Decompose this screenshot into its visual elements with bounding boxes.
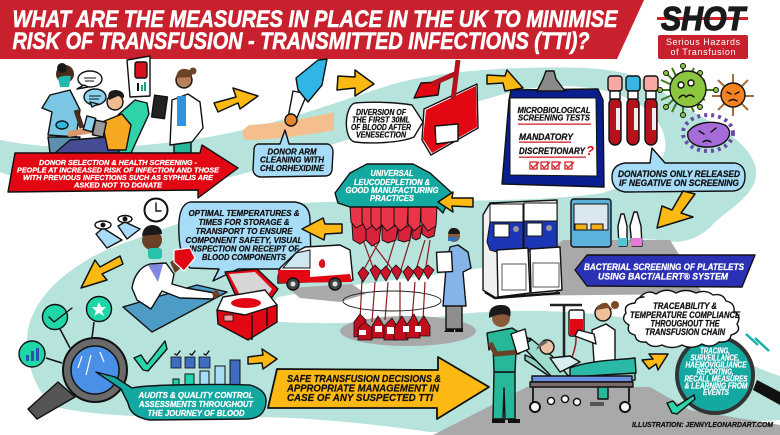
arrow: donor to arm <box>214 88 258 112</box>
magnifier handle <box>28 382 75 419</box>
header banner <box>0 0 644 59</box>
lower blood bags <box>354 314 430 340</box>
cloud: traceability: TEMPERATURE COMPLIANCE <box>630 310 741 320</box>
icon: check circle <box>42 304 72 330</box>
bubble: arm cleaning: CHLORHEXIDINE <box>260 163 324 173</box>
arrow: to diversion <box>337 70 374 96</box>
arrow: down to platelets <box>657 191 695 228</box>
bubble: donations released: DONATIONS ONLY RELEASED <box>618 169 740 179</box>
title: WHAT ARE THE MEASURES IN PLACE IN THE UK TO MINIMISE <box>12 6 618 33</box>
bubble: donations released <box>612 148 745 192</box>
bubble: arm cleaning <box>253 130 333 177</box>
bubble: audits: ASSESSMENTS THROUGHOUT <box>138 399 254 409</box>
icon: green virus <box>658 64 718 118</box>
icon: bars circle <box>19 341 45 367</box>
bubble: optimal temperatures: COMPONENT SAFETY, VISUAL <box>186 235 302 245</box>
title <box>12 6 618 55</box>
bubble: optimal temperatures: OPTIMAL TEMPERATURES & <box>188 208 300 218</box>
magnifier: tracing and surveillance: SURVEILLANCE, <box>690 354 740 362</box>
bubble: diversion: DIVERSION OF <box>356 108 406 117</box>
big yellow arrow: safe transfusion <box>268 357 489 419</box>
icon: chart poster <box>127 56 150 97</box>
clipboard: microbiological screening tests: ? <box>586 143 594 158</box>
illustration: arm cleaning <box>243 59 334 140</box>
magnifier: tracing and surveillance: & LEARNING FROM <box>684 382 748 390</box>
big yellow arrow: safe transfusion: SAFE TRANSFUSION DECISIONS & <box>287 373 441 385</box>
donor <box>55 90 131 153</box>
label: bacterial screening: USING BACT/ALERT® SYSTEM <box>598 272 728 282</box>
standing nurse <box>487 305 531 423</box>
SHOT logo <box>657 0 748 59</box>
bubble: donations released: IF NEGATIVE ON SCREENING <box>619 178 739 188</box>
icon: diversion blood bag <box>414 60 478 155</box>
title: RISK OF TRANSFUSION - TRANSMITTED INFECTIONS (TTI)? <box>12 28 590 55</box>
clipboard: microbiological screening tests: MANDATORY <box>519 132 574 142</box>
clipboard: microbiological screening tests <box>502 71 604 187</box>
grey floor shadows <box>288 240 780 435</box>
patient bed <box>522 338 636 412</box>
hexagon: leucodepletion: LEUCODEPLETION & <box>354 178 430 187</box>
tubing <box>360 240 430 322</box>
arrow: to bubble <box>302 218 342 240</box>
icon: clock <box>144 198 168 222</box>
illustration: incubator and bottles <box>571 199 642 247</box>
bedside nurse <box>575 301 619 406</box>
icon: blood sample tubes <box>608 76 658 145</box>
SHOT logo: SHOT <box>661 0 748 37</box>
red arrow: donor selection: DONOR SELECTION & HEALTH SCREENING - <box>39 158 198 167</box>
cloud: traceability: TRACEABILITY & <box>653 301 717 311</box>
illustration: inspector at desk <box>123 225 227 332</box>
cloud: traceability <box>624 290 741 348</box>
connector lines <box>46 322 94 363</box>
magnifier with quality icons <box>19 296 127 419</box>
filter bags <box>358 265 434 282</box>
red arrow: donor selection: PEOPLE AT INCREASED RISK OF INFECTION AND THOSE <box>17 166 219 174</box>
bubble: optimal temperatures: TIMES FOR STORAGE & <box>198 217 290 227</box>
cloud: traceability: TRANSFUSION CHAIN <box>645 327 726 337</box>
arrow: into hexagon <box>438 192 473 212</box>
magnifier: tracing and surveillance: EVENTS <box>703 388 730 397</box>
magnifier: tracing and surveillance: REPORTING, <box>696 368 734 376</box>
ring <box>343 291 441 311</box>
bubble: audits: AUDITS & QUALITY CONTROL <box>138 390 254 400</box>
icon: teal check <box>667 395 695 414</box>
clipboard: microbiological screening tests: DISCRETIONARY <box>519 146 586 156</box>
big yellow arrow: safe transfusion: APPROPRIATE MANAGEMENT IN <box>286 382 439 394</box>
SHOT logo: of Transfusion <box>670 47 736 57</box>
illustration: screening machines <box>483 200 562 298</box>
magnifier: tracing and surveillance: RECALL MEASURES <box>684 374 748 384</box>
big yellow arrow: safe transfusion: CASE OF ANY SUSPECTED TTI <box>287 392 434 404</box>
clipboard: microbiological screening tests: MICROBIOLOGICAL <box>518 105 590 115</box>
label: bacterial screening <box>575 255 755 287</box>
icon: orange virus <box>712 74 754 116</box>
bubble: optimal temperatures <box>179 202 311 281</box>
illustration: donor screening scene <box>42 56 203 153</box>
icon: watching eyes <box>95 216 140 248</box>
bubble: optimal temperatures: BLOOD COMPONENTS <box>202 252 286 262</box>
magnifier: tracing and surveillance <box>677 334 780 413</box>
arrow: down-left <box>81 256 123 288</box>
bubble: diversion: THE FIRST 30ML <box>352 116 410 124</box>
bubble: optimal temperatures: TRANSPORT TO ENSURE <box>196 226 293 236</box>
speech bubbles <box>77 71 106 107</box>
red arrow: donor selection: WITH PREVIOUS INFECTIONS SUCH AS SYPHILIS ARE <box>23 173 213 182</box>
icon: purple virus <box>683 115 733 151</box>
hanging blood bags <box>343 207 441 340</box>
magnifier: tracing and surveillance: TRACING, <box>700 346 730 356</box>
bubble: audits <box>96 372 266 420</box>
arrow: to clipboard <box>487 70 523 91</box>
bubble: diversion: OF BLOOD AFTER <box>351 123 411 132</box>
hexagon: leucodepletion: PRACTICES <box>370 194 414 203</box>
checkboxes <box>530 162 574 169</box>
illustration: transfusion bedside <box>487 301 636 423</box>
illustration: ambulance <box>278 245 353 290</box>
bubble: arm cleaning: DONOR ARM <box>268 146 317 156</box>
cloud: traceability: THROUGHOUT THE <box>650 318 720 328</box>
hexagon: leucodepletion: GOOD MANUFACTURING <box>346 186 439 195</box>
nurse <box>42 63 82 153</box>
hexagon: leucodepletion: UNIVERSAL <box>370 169 414 178</box>
arrow: to magnifier <box>642 354 668 370</box>
upper red bags <box>350 207 437 246</box>
illustration: red transport box <box>217 269 278 340</box>
bubble: arm cleaning: CLEANING WITH <box>260 154 325 164</box>
label: bacterial screening: BACTERIAL SCREENING OF PLATELETS <box>584 262 744 272</box>
icon: big check mark <box>134 341 167 371</box>
chair <box>118 100 149 153</box>
doctor with clipboard <box>152 68 203 153</box>
arrow: to safe transfusion <box>248 349 277 369</box>
mini bar chart with checklist <box>171 351 240 387</box>
clipboard: microbiological screening tests: SCREENING TESTS <box>518 112 590 122</box>
hexagon: leucodepletion <box>335 164 452 213</box>
illustration: lab scientist <box>436 228 471 332</box>
drip stand <box>550 305 584 360</box>
bubble: optimal temperatures: INSPECTION ON RECEIPT OF <box>189 244 300 254</box>
SHOT logo: Serious Hazards <box>666 37 740 47</box>
bubble: diversion: VENESECTION <box>356 130 406 140</box>
magnifier: tracing and surveillance: HAEMOVIGILIANCE <box>686 360 747 370</box>
red arrow: donor selection <box>8 145 238 198</box>
bubble: diversion <box>346 102 423 143</box>
bubble: audits: THE JOURNEY OF BLOOD <box>148 408 244 418</box>
red arrow: donor selection: ASKED NOT TO DONATE <box>73 180 162 190</box>
icon: star circle <box>86 296 112 322</box>
